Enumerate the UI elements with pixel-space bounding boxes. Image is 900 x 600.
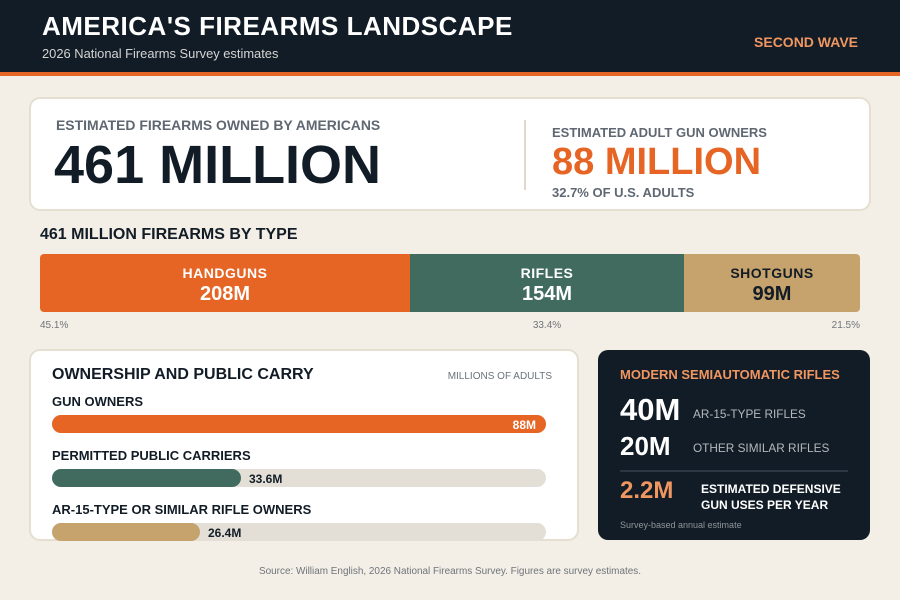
stacked bar chart: firearms by type bbox=[40, 254, 860, 312]
heading: firearms by type: 461 MILLION FIREARMS BY TYPE bbox=[40, 226, 298, 243]
panel: modern semiautomatic rifles bbox=[598, 350, 870, 540]
panel heading: MODERN SEMIAUTOMATIC RIFLES bbox=[620, 367, 840, 382]
gun owners label: ESTIMATED ADULT GUN OWNERS bbox=[552, 125, 767, 140]
title: AMERICA'S FIREARMS LANDSCAPE bbox=[42, 11, 513, 41]
bar: gun owners bbox=[52, 394, 546, 433]
panel: headline totals bbox=[29, 97, 871, 211]
stat: AR-15-type rifles: AR-15-TYPE RIFLES bbox=[693, 407, 806, 421]
stat: defensive gun uses bbox=[620, 477, 841, 512]
stat: other similar rifles bbox=[620, 431, 829, 461]
segment: shotguns: SHOTGUNS bbox=[730, 265, 814, 281]
gun owners share: 32.7% OF U.S. ADULTS bbox=[552, 185, 694, 200]
panel: ownership and public carry bbox=[29, 349, 579, 541]
bar: rifle owners: AR-15-TYPE OR SIMILAR RIFLE OWNERS bbox=[52, 502, 311, 517]
stat: other similar rifles: OTHER SIMILAR RIFLES bbox=[693, 441, 829, 455]
percentage labels bbox=[40, 320, 860, 331]
bar: permitted public carriers: 33.6M bbox=[249, 472, 282, 486]
header band bbox=[0, 0, 900, 76]
segment: rifles bbox=[410, 254, 684, 312]
bar: permitted public carriers bbox=[52, 448, 546, 487]
segment: shotguns bbox=[684, 254, 860, 312]
bar: rifle owners bbox=[52, 502, 546, 541]
subtitle: 2026 National Firearms Survey estimates bbox=[42, 46, 278, 61]
stat: defensive gun uses: ESTIMATED DEFENSIVE bbox=[701, 482, 841, 496]
firearms owned number: 461 MILLION bbox=[54, 135, 381, 195]
segment: handguns: 208M bbox=[200, 283, 250, 305]
segment: shotguns: 99M bbox=[753, 283, 791, 305]
segment: rifles: 154M bbox=[522, 283, 572, 305]
source line: Source: William English, 2026 National Firearms Survey. Figures are survey estimates. bbox=[259, 566, 641, 577]
bar: gun owners: 88M bbox=[513, 418, 536, 432]
percentage labels: 33.4% bbox=[533, 320, 561, 331]
segment: rifles: RIFLES bbox=[521, 265, 573, 281]
firearms owned label: ESTIMATED FIREARMS OWNED BY AMERICANS bbox=[56, 117, 380, 133]
bar: permitted public carriers: PERMITTED PUBLIC CARRIERS bbox=[52, 448, 251, 463]
segment: handguns: HANDGUNS bbox=[183, 265, 267, 281]
bar: rifle owners: 26.4M bbox=[208, 526, 241, 540]
stat: AR-15-type rifles bbox=[620, 392, 806, 427]
stat: AR-15-type rifles: 40M bbox=[620, 392, 680, 427]
percentage labels: 45.1% bbox=[40, 320, 68, 331]
panel heading: OWNERSHIP AND PUBLIC CARRY bbox=[52, 366, 314, 383]
wave tag: SECOND WAVE bbox=[754, 34, 858, 50]
footnote: Survey-based annual estimate bbox=[620, 520, 742, 530]
segment: handguns bbox=[40, 254, 410, 312]
units note: MILLIONS OF ADULTS bbox=[448, 371, 552, 382]
stat: defensive gun uses: 2.2M bbox=[620, 477, 673, 504]
stat: other similar rifles: 20M bbox=[620, 431, 671, 461]
stat: defensive gun uses: GUN USES PER YEAR bbox=[701, 498, 828, 512]
percentage labels: 21.5% bbox=[832, 320, 860, 331]
gun owners number: 88 MILLION bbox=[552, 141, 761, 183]
bar: gun owners: GUN OWNERS bbox=[52, 394, 143, 409]
